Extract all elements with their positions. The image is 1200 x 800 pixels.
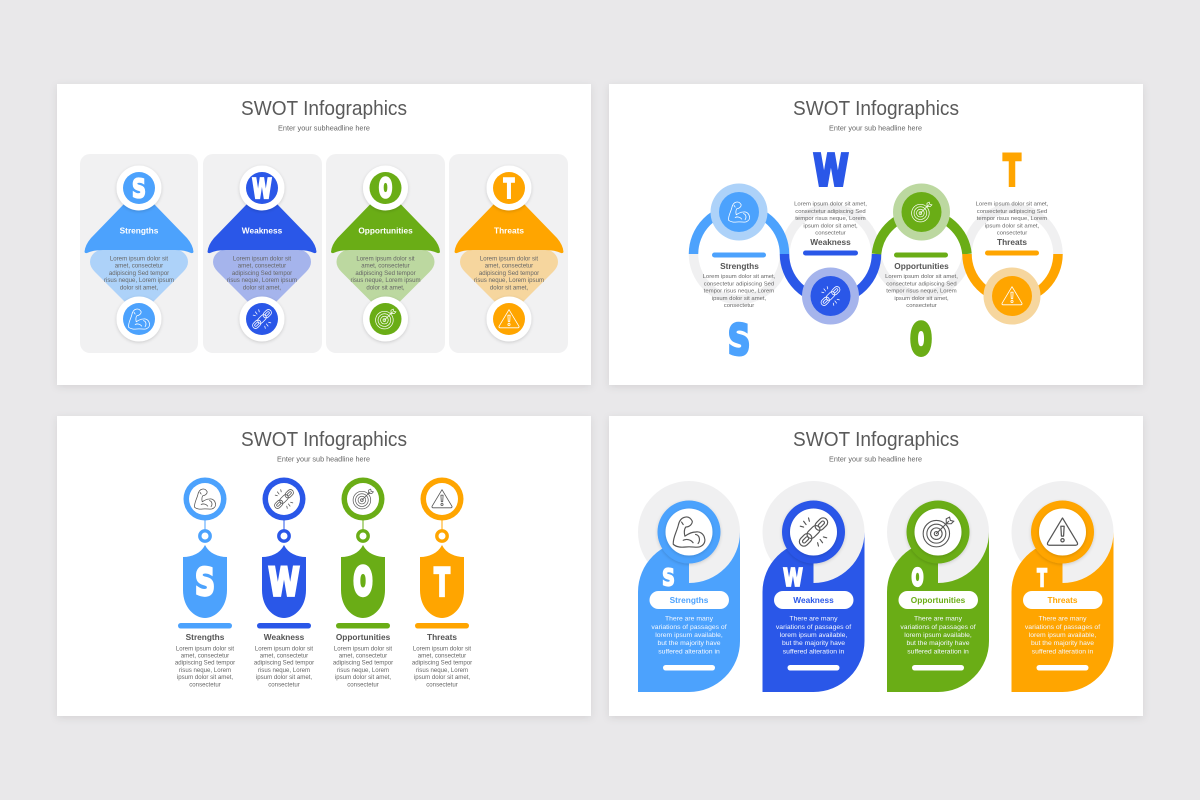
card: strengths: Strengths	[120, 226, 159, 236]
column: threats: lorem ipsum available,	[1029, 632, 1096, 639]
step: strengths: ipsum dolor sit amet,	[712, 296, 767, 302]
tag: strengths: amet, consectetur	[181, 652, 229, 660]
column: weakness: There are many	[790, 616, 838, 623]
card: opportunities: O	[379, 174, 392, 204]
column: weakness: variations of passages of	[776, 624, 851, 631]
column: weakness: but the majority have	[782, 640, 845, 647]
subtitle: Enter your sub headline here	[277, 454, 370, 464]
tag: opportunities: amet, consectetur	[339, 652, 387, 660]
column: opportunities: but the majority have	[906, 640, 970, 647]
step: weakness	[784, 146, 876, 324]
step: weakness: consectetur	[815, 230, 846, 236]
card: weakness: risus neque, Lorem ipsum	[227, 277, 297, 284]
panel: SWOT wave	[609, 84, 1143, 385]
card: weakness: Lorem ipsum dolor sit	[233, 256, 291, 262]
step: opportunities: tempor risus neque, Lorem	[886, 289, 957, 295]
card: opportunities: risus neque, Lorem ipsum	[350, 277, 421, 284]
tag: threats: T	[434, 559, 450, 606]
step: threats: T	[1003, 144, 1021, 197]
tag: threats: adipiscing Sed tempor	[412, 660, 472, 667]
wave: grey arcs	[694, 208, 1058, 300]
step: weakness: W	[813, 146, 849, 197]
column: opportunities: Opportunities	[911, 595, 966, 605]
column: strengths	[638, 481, 740, 692]
tag: strengths: Strengths	[186, 632, 225, 642]
column: strengths: variations of passages of	[651, 624, 727, 631]
step: opportunities: Lorem ipsum dolor sit amet,	[885, 274, 958, 280]
tag: weakness: consectetur	[268, 681, 300, 688]
step: strengths: consectetur adipiscing Sed	[704, 281, 774, 287]
tag: opportunities: consectetur	[347, 681, 379, 688]
tag: threats: ipsum dolor sit amet,	[414, 674, 470, 681]
card: threats: risus neque, Lorem ipsum	[474, 277, 544, 284]
step: weakness: tempor risus neque, Lorem	[795, 216, 866, 222]
tag: strengths: Lorem ipsum dolor sit	[176, 645, 234, 652]
step: weakness: ipsum dolor sit amet,	[803, 223, 858, 229]
tag: strengths: S	[195, 560, 215, 604]
column: opportunities: There are many	[914, 616, 963, 623]
column: opportunities	[887, 481, 989, 692]
column: threats: Threats	[1048, 595, 1078, 605]
card: weakness: dolor sit amet,	[243, 284, 281, 291]
card: strengths: amet, consectetur	[115, 263, 163, 270]
card: weakness	[203, 154, 322, 353]
card: strengths: risus neque, Lorem ipsum	[104, 277, 174, 284]
card: strengths: S	[132, 175, 146, 204]
tag: weakness: Lorem ipsum dolor sit	[255, 645, 313, 652]
tag: strengths: ipsum dolor sit amet,	[177, 674, 233, 681]
tag: opportunities: adipiscing Sed tempor	[333, 660, 393, 667]
card: opportunities: adipiscing Sed tempor	[355, 270, 416, 277]
step: threats: Threats	[997, 237, 1027, 247]
title: SWOT Infographics	[241, 429, 407, 451]
title: SWOT Infographics	[793, 98, 959, 120]
tag: opportunities: ipsum dolor sit amet,	[335, 674, 391, 681]
panel: SWOT diamond cards	[57, 84, 591, 385]
panel: SWOT badge columns	[609, 416, 1143, 716]
subtitle: Enter your subheadline here	[278, 124, 370, 132]
tag: opportunities	[333, 478, 393, 688]
step: threats: tempor risus neque, Lorem	[977, 216, 1047, 222]
tag: threats	[412, 478, 472, 688]
card: threats: amet, consectetur	[485, 263, 533, 270]
step: weakness: Lorem ipsum dolor sit amet,	[794, 202, 867, 208]
tag: threats: Threats	[427, 632, 457, 642]
column: threats	[1012, 481, 1114, 692]
column: weakness: W	[783, 564, 803, 593]
column: threats: There are many	[1039, 616, 1087, 623]
card: threats: dolor sit amet,	[490, 284, 528, 291]
step: threats: consectetur adipiscing Sed	[977, 209, 1047, 215]
card: threats	[449, 154, 568, 353]
tag: threats: amet, consectetur	[418, 652, 466, 660]
card: weakness: adipiscing Sed tempor	[232, 270, 292, 277]
column: opportunities: variations of passages of	[900, 624, 976, 631]
card: opportunities	[326, 154, 445, 353]
tag: opportunities: O	[354, 561, 372, 604]
card: threats: adipiscing Sed tempor	[479, 270, 539, 277]
tag: weakness: amet, consectetur	[260, 652, 308, 660]
step: weakness: Weakness	[810, 237, 851, 247]
column: weakness: lorem ipsum available,	[780, 632, 847, 639]
step: threats: consectetur	[997, 230, 1027, 236]
step: strengths: consectetur	[724, 303, 754, 309]
step: threats: ipsum dolor sit amet,	[985, 223, 1040, 229]
step: threats: Lorem ipsum dolor sit amet,	[976, 202, 1049, 208]
column: strengths: suffered alteration in	[658, 648, 720, 655]
panel: SWOT tags	[57, 416, 591, 716]
tag: weakness: risus neque, Lorem	[258, 667, 310, 674]
column: opportunities: suffered alteration in	[907, 648, 969, 655]
column: threats: variations of passages of	[1025, 624, 1100, 631]
column: opportunities: O	[912, 563, 923, 591]
step: strengths: Strengths	[720, 261, 759, 271]
step: strengths: Lorem ipsum dolor sit amet,	[703, 274, 776, 280]
step: opportunities: ipsum dolor sit amet,	[894, 296, 949, 302]
card: threats: Threats	[494, 226, 524, 236]
tag: weakness: W	[268, 560, 300, 606]
column: strengths: but the majority have	[657, 640, 721, 647]
step: opportunities: consectetur	[906, 303, 937, 309]
step: strengths: S	[728, 316, 750, 365]
title: SWOT Infographics	[241, 98, 407, 120]
tag: opportunities: risus neque, Lorem	[337, 667, 389, 674]
card: opportunities: dolor sit amet,	[366, 284, 405, 291]
column: weakness	[762, 481, 864, 692]
tag: strengths: adipiscing Sed tempor	[175, 660, 235, 667]
tag: strengths: risus neque, Lorem	[179, 667, 231, 674]
card: threats: Lorem ipsum dolor sit	[480, 256, 538, 262]
card: opportunities: amet, consectetur	[361, 263, 410, 270]
tag: opportunities: Lorem ipsum dolor sit	[334, 645, 392, 652]
card: opportunities: Lorem ipsum dolor sit	[356, 256, 415, 262]
subtitle: Enter your sub headline here	[829, 454, 922, 464]
column: strengths: There are many	[665, 616, 714, 623]
card: strengths: dolor sit amet,	[120, 284, 158, 291]
subtitle: Enter your sub headline here	[829, 124, 922, 132]
step: opportunities: Opportunities	[894, 261, 949, 271]
step: opportunities	[876, 184, 967, 365]
tag: strengths	[175, 478, 235, 688]
step: threats	[967, 144, 1058, 324]
title: SWOT Infographics	[793, 429, 959, 451]
tag: weakness: adipiscing Sed tempor	[254, 660, 314, 667]
tag: weakness: Weakness	[264, 632, 305, 642]
tag: weakness	[254, 478, 314, 688]
step: strengths: tempor risus neque, Lorem	[704, 289, 774, 295]
card: threats: T	[503, 174, 515, 205]
step: weakness: consectetur adipiscing Sed	[795, 209, 866, 215]
step: opportunities: O	[910, 316, 932, 365]
column: opportunities: lorem ipsum available,	[904, 632, 972, 639]
column: strengths: S	[662, 564, 675, 591]
card: opportunities: Opportunities	[358, 226, 413, 236]
column: strengths: lorem ipsum available,	[655, 632, 723, 639]
card: weakness: W	[252, 174, 272, 205]
tag: threats: risus neque, Lorem	[416, 667, 468, 674]
column: threats: but the majority have	[1031, 640, 1094, 647]
step: strengths	[694, 184, 784, 365]
card: weakness: Weakness	[242, 226, 283, 236]
card: strengths: Lorem ipsum dolor sit	[110, 256, 168, 262]
column: threats: suffered alteration in	[1032, 648, 1093, 655]
card: strengths	[80, 154, 198, 353]
tag: threats: consectetur	[426, 681, 458, 688]
tag: opportunities: Opportunities	[336, 632, 391, 642]
tag: strengths: consectetur	[189, 681, 221, 688]
card: weakness: amet, consectetur	[238, 263, 286, 270]
card: strengths: adipiscing Sed tempor	[109, 270, 169, 277]
tag: weakness: ipsum dolor sit amet,	[256, 674, 312, 681]
column: strengths: Strengths	[670, 595, 709, 605]
column: weakness: suffered alteration in	[783, 648, 844, 655]
tag: threats: Lorem ipsum dolor sit	[413, 645, 471, 652]
column: weakness: Weakness	[793, 595, 834, 605]
column: threats: T	[1037, 563, 1047, 592]
step: opportunities: consectetur adipiscing Sed	[886, 281, 957, 287]
